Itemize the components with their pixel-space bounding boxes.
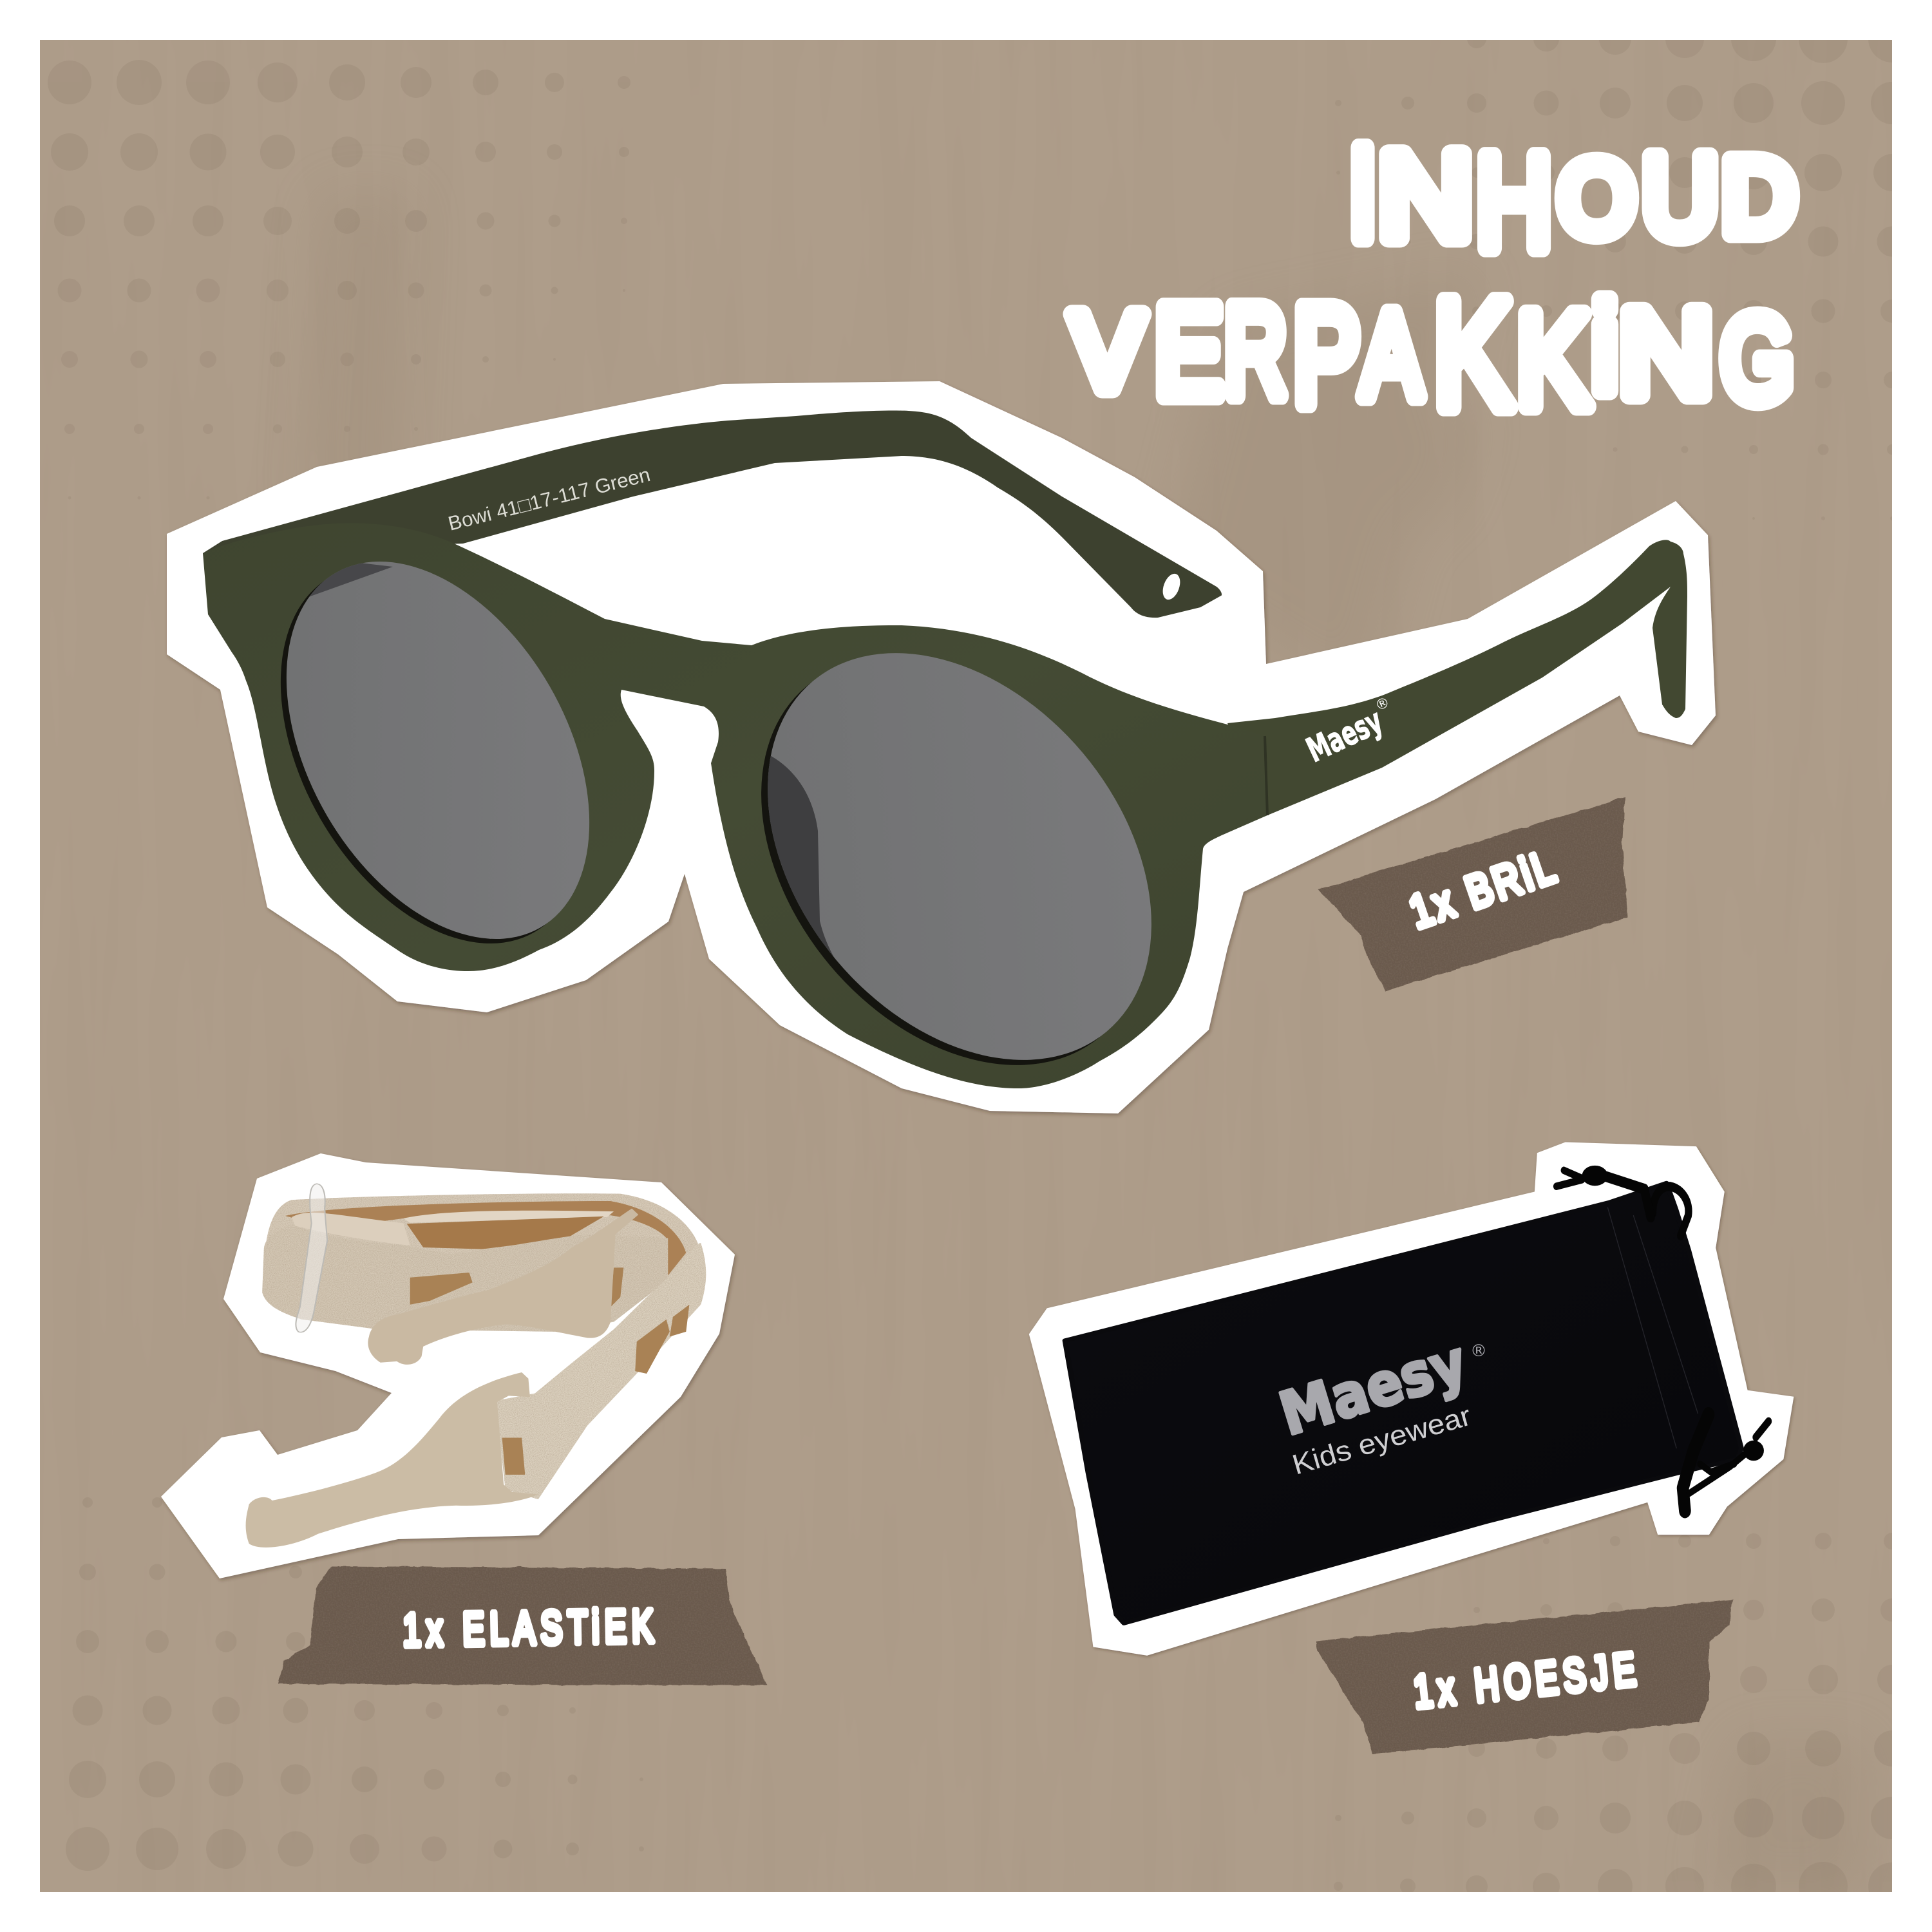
- title: [1072, 120, 1796, 440]
- title line: inhoud: N: [1378, 128, 1473, 265]
- title line: verpakking: N: [1619, 285, 1713, 422]
- white cutout backing: [167, 381, 1716, 1113]
- title line: verpakking: G: [1721, 291, 1794, 427]
- title line: inhoud: U: [1642, 132, 1718, 261]
- lower hook: [246, 1372, 538, 1548]
- near temple arm: [1227, 540, 1687, 815]
- tape strip: [279, 1566, 767, 1685]
- panel: elastic strap cutout: [161, 1153, 735, 1578]
- white cutout backing: [161, 1153, 735, 1578]
- bottom cord tail: [1756, 1421, 1768, 1437]
- temple logo: ®: [1373, 694, 1392, 715]
- black lens rims: [218, 513, 1224, 1141]
- left lens: [224, 509, 652, 992]
- right lens: [689, 578, 1230, 1135]
- title line: verpakking: K: [1434, 268, 1513, 440]
- far temple arm: [203, 410, 1222, 618]
- right lens dark reflection: [768, 756, 834, 957]
- title line: verpakking: E: [1155, 279, 1223, 424]
- front band: [262, 1224, 620, 1332]
- title line: inhoud: H: [1476, 128, 1552, 276]
- title line: verpakking: K: [1517, 285, 1590, 435]
- registered mark: ®: [1470, 1341, 1487, 1361]
- label text: 1x ELASTiEK: [402, 1600, 654, 1656]
- rear strap segment: [614, 1236, 668, 1322]
- left lens reflection of arm: [310, 563, 393, 596]
- clear buckle: [296, 1184, 327, 1332]
- tan inner band: [285, 1201, 686, 1278]
- tape strip: [1318, 797, 1627, 991]
- tape strip: [1317, 1600, 1732, 1754]
- hinge seam: [1265, 736, 1267, 815]
- tan logo block: [407, 1217, 604, 1249]
- arm engraving: Bowi 41□17-117 Green: [446, 463, 652, 535]
- white cutout backing: [1029, 1142, 1794, 1656]
- pouch seams: [1608, 1208, 1698, 1448]
- title line: verpakking: P: [1293, 278, 1360, 434]
- outer band: [264, 1193, 703, 1282]
- seams and cords: [1557, 1166, 1768, 1511]
- front frame: [203, 523, 1267, 1088]
- bottom cord loop: [1683, 1415, 1709, 1511]
- arm strap hole: [1160, 571, 1183, 602]
- label: 1x hoesje: [1317, 1600, 1732, 1754]
- bottom knot: [1743, 1441, 1764, 1461]
- label: 1x elastiek: [279, 1566, 767, 1685]
- pouch body: [1065, 1183, 1741, 1623]
- label text: 1x BRiL: [1403, 840, 1561, 938]
- upper hook: [368, 1209, 638, 1365]
- pouch tagline: Kids eyewear: [1289, 1400, 1475, 1481]
- title line: verpakking: V: [1072, 290, 1143, 412]
- thin cords: [1689, 1451, 1749, 1493]
- top cord loop: [1653, 1186, 1689, 1236]
- title line: inhoud: D: [1722, 137, 1796, 257]
- pouch logo: Maesy: [1272, 1327, 1474, 1449]
- folded inner strip: [292, 1213, 410, 1245]
- title line: inhoud: O: [1558, 139, 1635, 257]
- title line: verpakking: i: [1592, 277, 1618, 418]
- long right strap: [495, 1243, 706, 1499]
- title line: verpakking: R: [1224, 279, 1287, 423]
- woven logo marks: [410, 1267, 689, 1475]
- label text: 1x HOESJE: [1411, 1643, 1638, 1718]
- title line: inhoud: I: [1349, 120, 1377, 267]
- top knot: [1582, 1166, 1608, 1186]
- strap drawing: [246, 1184, 706, 1548]
- top cord: [1604, 1176, 1651, 1217]
- title line: verpakking: A: [1361, 287, 1421, 423]
- temple logo: Maesy: [1301, 702, 1388, 770]
- panel: pouch cutout: [1029, 1142, 1794, 1656]
- panel: sunglasses cutout: [167, 381, 1716, 1141]
- top cord tail: [1557, 1170, 1582, 1186]
- label: 1x bril: [1318, 797, 1627, 991]
